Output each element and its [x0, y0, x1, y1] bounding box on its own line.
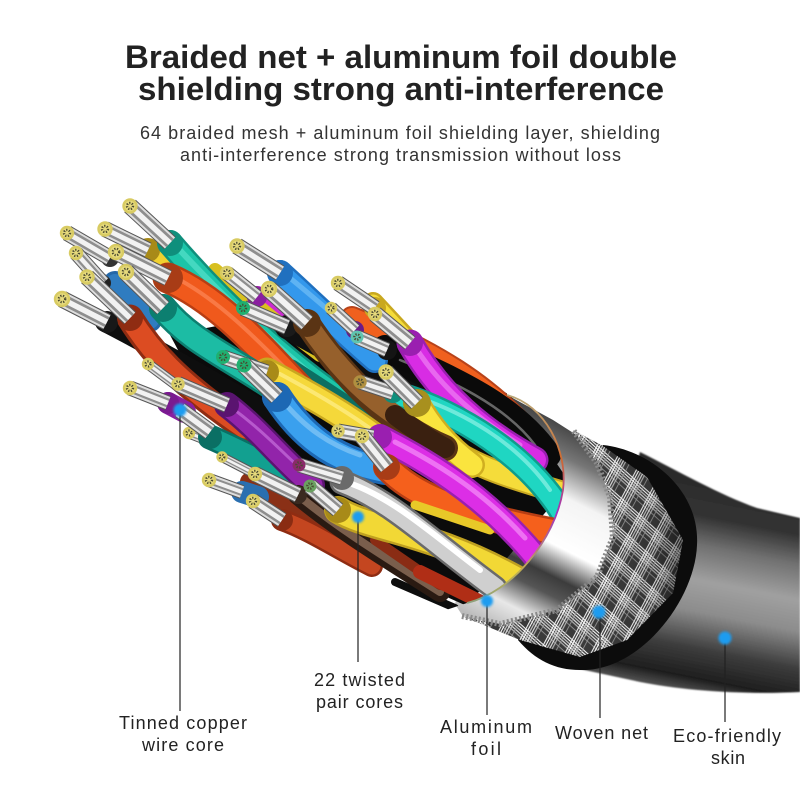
title: [125, 39, 677, 107]
callout: 22 twisted pair cores: pair cores: [316, 692, 403, 712]
title: shielding strong anti-interference: [138, 71, 664, 107]
callout: eco-friendly skin: Eco-friendly: [673, 726, 781, 746]
yellow wire, left: [267, 372, 385, 445]
wire tips: [55, 200, 431, 531]
orange wire, lower: [387, 467, 555, 532]
teal wire, top: [160, 230, 374, 419]
dark core mass: [170, 310, 570, 606]
title: Braided net + aluminum foil double: [125, 39, 677, 75]
subtitle: anti-interference strong transmission without loss: [180, 145, 621, 165]
yellow wire, front: [338, 510, 522, 582]
teal wire, dark: [210, 437, 290, 476]
cable: wire bundle: [55, 200, 570, 608]
red wire: [130, 318, 245, 428]
callout: aluminum foil: foil: [471, 739, 501, 759]
callout: eco-friendly skin: [673, 632, 781, 768]
cable: woven net: [462, 430, 683, 657]
teal wire, middle: [163, 308, 270, 385]
cable: aluminum foil: [455, 395, 625, 635]
brown wire: [307, 323, 445, 448]
callout: woven net: [555, 606, 648, 743]
cable: jacket cut ring: [518, 445, 697, 670]
subtitle: 64 braided mesh + aluminum foil shielding layer, shielding: [140, 123, 660, 143]
yellow wire, near segment: [417, 403, 472, 465]
subtitle: [140, 123, 660, 165]
magenta wire, top: [410, 343, 535, 460]
callout: tinned copper wire core: [119, 404, 247, 755]
callout: tinned copper wire core: wire core: [141, 735, 224, 755]
silver wire: [342, 482, 495, 588]
blue wire, top: [280, 273, 375, 360]
purple wire: [227, 405, 312, 485]
yellow wire, far segment: [468, 446, 563, 498]
callout: 22 twisted pair cores: 22 twisted: [314, 670, 405, 690]
callout: eco-friendly skin: skin: [711, 748, 745, 768]
lower brown and red wires: [168, 403, 485, 608]
back wires: [100, 250, 548, 455]
callout: 22 twisted pair cores: [314, 511, 405, 712]
callout: aluminum foil: [440, 595, 532, 759]
callout: aluminum foil: Aluminum: [440, 717, 532, 737]
orange wire, large: [168, 278, 305, 395]
cable: black outer jacket: [575, 452, 800, 693]
callout: woven net: Woven net: [555, 723, 648, 743]
teal wire, bright: [393, 393, 562, 512]
magenta wire, front: [380, 437, 535, 556]
blue wire, lower: [277, 397, 385, 470]
callout: tinned copper wire core: Tinned copper: [119, 713, 247, 733]
foil opening rim: [467, 395, 564, 603]
